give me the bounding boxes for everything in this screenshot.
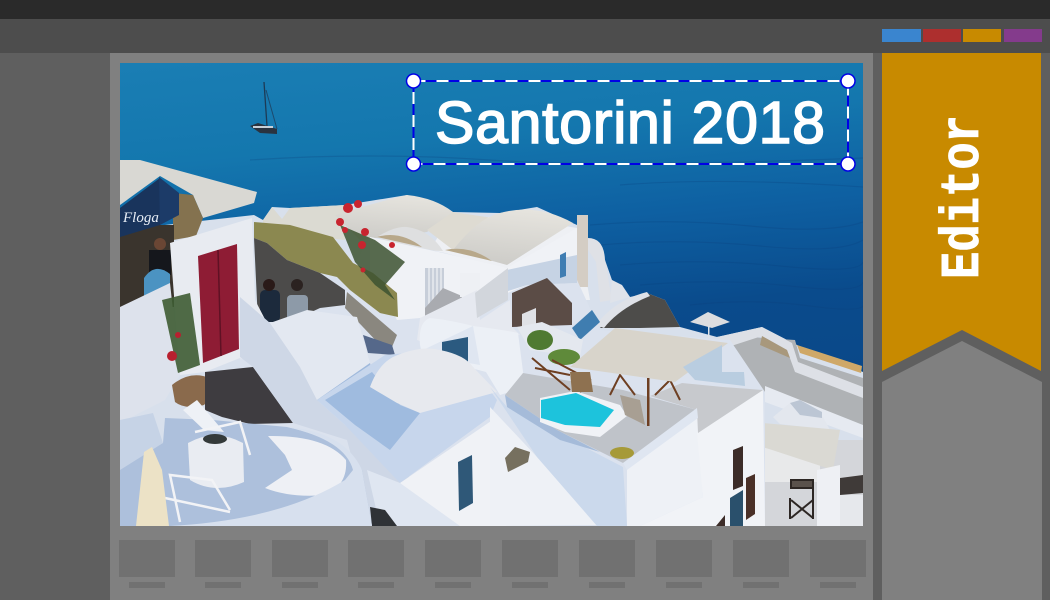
director chair — [790, 480, 813, 519]
white parapet wall — [417, 297, 520, 340]
ribbon shadow — [882, 53, 1042, 382]
ribbon label: Editor — [932, 115, 995, 279]
round terrace — [120, 400, 372, 526]
colour swatches — [882, 29, 1042, 42]
door wall — [170, 218, 300, 380]
cafe patrons — [144, 238, 171, 296]
white building front — [367, 417, 506, 526]
lava rock bed — [205, 367, 293, 424]
parasol — [136, 447, 169, 526]
sailboat — [250, 82, 277, 134]
parapet top — [650, 383, 763, 433]
right terrace — [734, 338, 863, 425]
large umbrella — [570, 328, 728, 426]
lounge chairs — [620, 395, 645, 425]
left white wall — [120, 283, 180, 423]
dome right — [453, 210, 573, 265]
main canvas panel — [110, 53, 873, 600]
curved wall — [240, 297, 470, 526]
window upper — [560, 252, 566, 278]
left gutter — [0, 53, 110, 600]
top bar — [0, 0, 1050, 19]
cafe interior — [120, 225, 174, 307]
cafe sign — [120, 177, 179, 237]
windows — [716, 446, 755, 526]
steps by gate — [425, 288, 462, 316]
terrace wall — [170, 427, 372, 526]
stone building — [512, 278, 572, 327]
terrace low wall — [765, 386, 863, 438]
sea — [120, 63, 863, 372]
front wall — [627, 410, 703, 526]
lower left mass — [490, 407, 597, 526]
terrace floor — [505, 373, 697, 463]
pool — [540, 391, 627, 437]
wooden bench — [797, 345, 862, 373]
small umbrella — [690, 312, 730, 335]
sunlit dome — [370, 349, 497, 413]
stone retaining wall — [345, 292, 397, 347]
flat roof — [428, 212, 488, 249]
sea ripples — [250, 156, 863, 245]
chimney — [577, 215, 588, 287]
window — [442, 337, 468, 362]
big dome roof — [317, 349, 497, 483]
text selection box — [406, 74, 855, 171]
upper terrace buildings — [263, 195, 590, 300]
rocks — [254, 238, 345, 322]
lower right courtyard — [757, 440, 863, 526]
terrace parapet — [717, 327, 863, 398]
steps — [773, 400, 830, 430]
red door — [198, 244, 239, 363]
white wall long — [370, 237, 525, 320]
stone wall — [600, 293, 680, 328]
dome left — [345, 195, 453, 238]
tourists — [260, 279, 308, 322]
table on terrace — [570, 372, 593, 392]
selection handles — [406, 74, 855, 171]
cafe awning — [120, 160, 257, 218]
toolbar — [0, 19, 1050, 53]
mid building mass — [370, 237, 765, 512]
lattice — [475, 268, 508, 318]
deck chairs — [183, 400, 224, 432]
terrace steps — [120, 413, 163, 477]
shaded wall — [490, 387, 627, 526]
stones on ledge — [505, 447, 530, 472]
sun patch — [265, 436, 346, 496]
blue walkway — [572, 310, 600, 340]
sidebar panel — [882, 53, 1042, 600]
inner dome — [377, 227, 443, 251]
dark foundation — [370, 507, 397, 526]
planter frame — [517, 322, 583, 357]
cafe sign: Floga — [122, 210, 159, 226]
planters — [527, 330, 580, 365]
rock outcrop — [612, 280, 630, 297]
red flowers — [336, 200, 395, 272]
curved walkway — [588, 238, 606, 262]
glazed room under umbrella — [683, 345, 745, 386]
terrace chairs — [532, 358, 680, 400]
white canopy — [765, 423, 840, 466]
courtyard column — [817, 465, 840, 526]
thumbnail strip — [119, 540, 866, 588]
potted plant — [162, 293, 211, 407]
round table — [188, 436, 244, 488]
corner wall — [640, 390, 765, 526]
photo: Santorini — [120, 63, 864, 526]
window — [458, 455, 473, 511]
title: Santorini 2018 — [435, 90, 825, 156]
window dome block — [420, 318, 525, 395]
gate — [425, 268, 444, 308]
yellow planter — [610, 447, 634, 459]
cafe stone wall — [173, 193, 203, 240]
editor ribbon — [882, 53, 1041, 371]
hill shrubs and climbers — [254, 200, 405, 317]
land base — [130, 195, 863, 444]
post — [460, 295, 462, 297]
brown arches — [377, 235, 422, 247]
